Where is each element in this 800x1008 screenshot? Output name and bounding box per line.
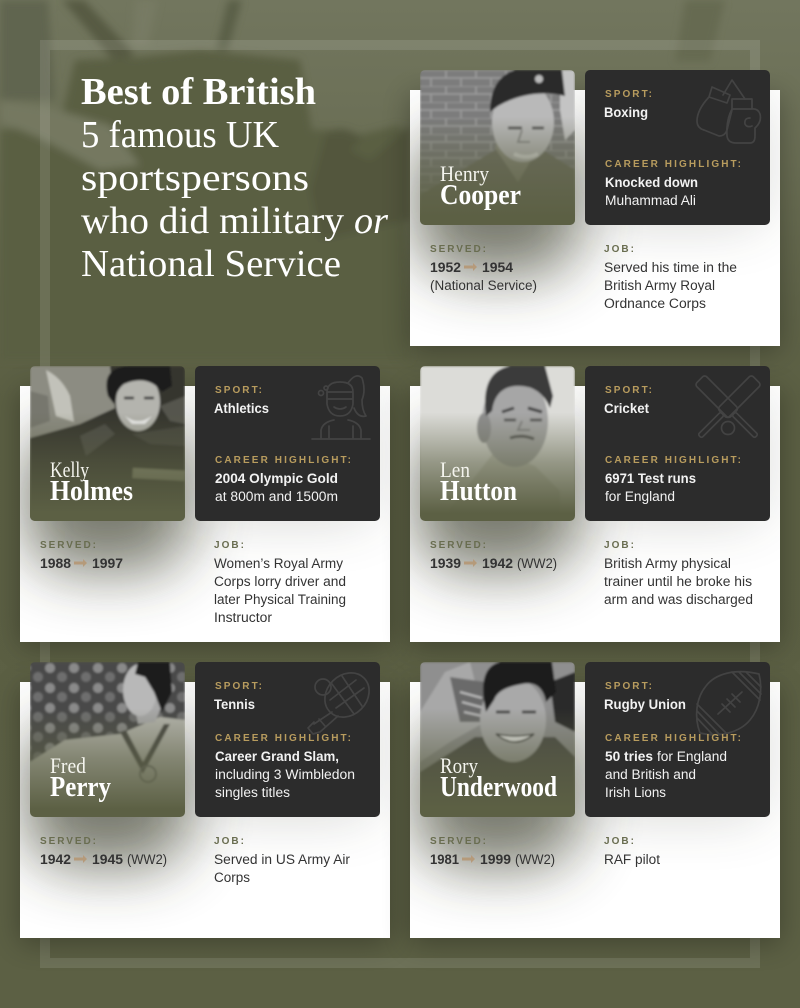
card: Kelly Holmes <box>20 366 390 647</box>
name: Fred Perry: Fred <box>50 753 86 778</box>
name: Rory Underwood <box>440 753 557 803</box>
photo: Fred Perry <box>30 662 185 817</box>
job <box>604 244 737 311</box>
photo: Rory Underwood <box>420 662 575 817</box>
name: Rory Underwood: Rory <box>440 753 478 778</box>
panel: sport and highlight: Boxing <box>604 105 648 120</box>
title: 5 famous UK <box>81 114 280 156</box>
panel: sport and highlight: for England <box>657 749 727 764</box>
name: Kelly Holmes: Kelly <box>50 457 89 482</box>
job: JOB: <box>214 540 244 551</box>
job: JOB: <box>604 836 634 847</box>
title <box>81 71 388 285</box>
title: National Service <box>81 243 341 285</box>
name: Len Hutton: Len <box>440 457 470 482</box>
served dates: (WW2) <box>127 852 167 867</box>
served dates: 1942 <box>40 851 71 867</box>
job: Served his time in the <box>604 260 737 275</box>
served dates: SERVED: <box>430 540 486 551</box>
job <box>604 836 660 867</box>
photo: Henry Cooper <box>420 70 575 225</box>
name: Henry Cooper: Cooper <box>440 179 521 211</box>
name: Fred Perry: Perry <box>50 771 111 803</box>
name: Rory Underwood: Underwood <box>440 771 557 803</box>
served dates <box>430 540 557 571</box>
title: Best of British <box>81 71 316 113</box>
panel: sport and highlight <box>585 662 770 817</box>
panel: sport and highlight: CAREER HIGHLIGHT: <box>215 455 351 466</box>
photo: Len Hutton <box>420 366 575 521</box>
icon: female athlete <box>312 376 370 439</box>
served dates: SERVED: <box>430 244 486 255</box>
panel: sport and highlight: singles titles <box>215 785 290 800</box>
name: Kelly Holmes: Holmes <box>50 475 133 507</box>
served dates: 1981 <box>430 851 459 867</box>
icon: rugby ball <box>697 672 761 735</box>
job <box>214 836 351 885</box>
icon: cricket bats <box>695 375 761 441</box>
served dates: 1988 <box>40 555 71 571</box>
card: Rory Underwood <box>410 662 780 943</box>
panel: sport and highlight: Cricket <box>604 401 649 416</box>
job: Instructor <box>214 610 273 625</box>
job: JOB: <box>214 836 244 847</box>
served dates: 1942 <box>482 555 513 571</box>
icon: boxing gloves <box>697 80 760 143</box>
photo: Kelly Holmes <box>30 366 185 521</box>
name: Henry Cooper <box>440 161 521 211</box>
panel: sport and highlight: Tennis <box>214 697 255 712</box>
job: RAF pilot <box>604 852 660 867</box>
title: or <box>354 200 388 242</box>
job <box>214 540 346 625</box>
panel: sport and highlight <box>195 366 380 521</box>
job: JOB: <box>604 540 634 551</box>
served dates: SERVED: <box>430 836 486 847</box>
panel: sport and highlight: CAREER HIGHLIGHT: <box>605 733 741 744</box>
panel: sport and highlight: Career Grand Slam, <box>215 749 339 764</box>
panel: sport and highlight <box>585 70 770 225</box>
panel: sport and highlight: CAREER HIGHLIGHT: <box>215 733 351 744</box>
served dates: SERVED: <box>40 836 96 847</box>
panel: sport and highlight: Irish Lions <box>605 785 666 800</box>
panel: sport and highlight: including 3 Wimbledon <box>215 767 355 782</box>
served dates: (WW2) <box>515 852 555 867</box>
panel: sport and highlight: 6971 Test runs <box>605 471 696 486</box>
card: Len Hutton <box>410 366 780 647</box>
card: Henry Cooper <box>410 70 780 351</box>
name: Len Hutton <box>440 457 517 507</box>
job <box>604 540 753 607</box>
panel: sport and highlight: and British and <box>605 767 696 782</box>
panel: sport and highlight: CAREER HIGHLIGHT: <box>605 455 741 466</box>
panel: sport and highlight: SPORT: <box>605 681 652 692</box>
job: Ordnance Corps <box>604 296 706 311</box>
served dates: 1939 <box>430 555 461 571</box>
name: Len Hutton: Hutton <box>440 475 517 507</box>
served dates <box>430 244 537 293</box>
panel: sport and highlight: 50 tries <box>605 749 653 764</box>
name: Kelly Holmes <box>50 457 133 507</box>
job: British Army Royal <box>604 278 715 293</box>
served dates: 1999 <box>480 851 511 867</box>
job: later Physical Training <box>214 592 346 607</box>
icon: tennis racket <box>308 664 378 734</box>
job: Corps lorry driver and <box>214 574 346 589</box>
panel: sport and highlight: 2004 Olympic Gold <box>215 471 338 486</box>
panel: sport and highlight: SPORT: <box>605 385 652 396</box>
panel: sport and highlight <box>195 662 380 817</box>
job: Served in US Army Air <box>214 852 351 867</box>
served dates <box>430 836 555 867</box>
served dates: SERVED: <box>40 540 96 551</box>
panel: sport and highlight: Athletics <box>214 401 269 416</box>
panel: sport and highlight <box>585 366 770 521</box>
served dates: 1954 <box>482 259 513 275</box>
job: arm and was discharged <box>604 592 753 607</box>
served dates: (WW2) <box>517 556 557 571</box>
card: Fred Perry <box>20 662 390 943</box>
job: JOB: <box>604 244 634 255</box>
served dates: (National Service) <box>430 278 537 293</box>
name: Fred Perry <box>50 753 111 803</box>
title: who did military <box>81 200 344 242</box>
name: Henry Cooper: Henry <box>440 161 489 186</box>
panel: sport and highlight: at 800m and 1500m <box>215 489 338 504</box>
title: sportspersons <box>81 157 309 199</box>
served dates <box>40 540 123 571</box>
job: British Army physical <box>604 556 731 571</box>
panel: sport and highlight: SPORT: <box>215 681 262 692</box>
served dates: 1997 <box>92 555 123 571</box>
panel: sport and highlight: Muhammad Ali <box>605 193 696 208</box>
panel: sport and highlight: for England <box>605 489 675 504</box>
panel: sport and highlight: SPORT: <box>215 385 262 396</box>
served dates <box>40 836 167 867</box>
panel: sport and highlight: SPORT: <box>605 89 652 100</box>
job: Corps <box>214 870 250 885</box>
panel: sport and highlight: Knocked down <box>605 175 698 190</box>
served dates: 1952 <box>430 259 461 275</box>
panel: sport and highlight: Rugby Union <box>604 697 686 712</box>
job: Women’s Royal Army <box>214 556 343 571</box>
served dates: 1945 <box>92 851 123 867</box>
job: trainer until he broke his <box>604 574 752 589</box>
panel: sport and highlight: CAREER HIGHLIGHT: <box>605 159 741 170</box>
